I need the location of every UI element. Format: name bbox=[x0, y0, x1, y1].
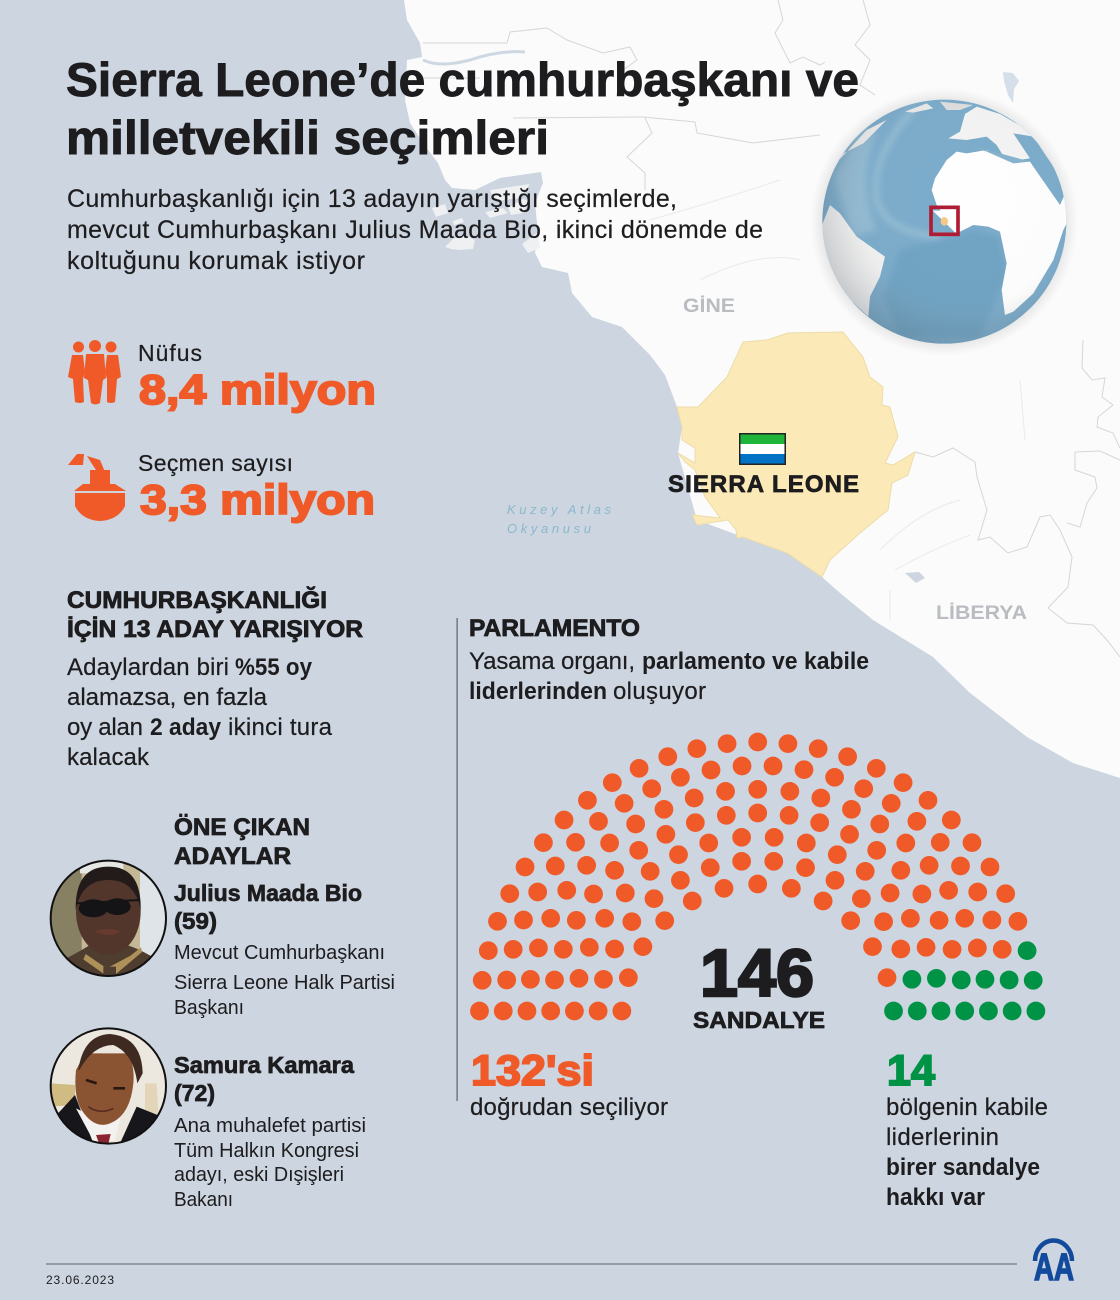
seats: elected orange bbox=[470, 733, 1027, 1020]
map: Sierra Leone territory bbox=[677, 332, 915, 577]
subtitle: koltuğunu korumak istiyor bbox=[67, 247, 365, 275]
seats: tribal chiefs green bbox=[884, 941, 1045, 1020]
icon: red location box bbox=[931, 207, 958, 234]
heading: parliament: PARLAMENTO bbox=[469, 615, 640, 642]
text block: runoff rule: ikinci tura bbox=[228, 714, 333, 741]
callout: 14 tribal chiefs: 14 bbox=[887, 1047, 935, 1095]
callout: 132 directly elected bbox=[470, 1047, 668, 1121]
callout: 14 tribal chiefs bbox=[886, 1047, 1048, 1211]
stat: voters bbox=[68, 450, 375, 523]
subtitle: Cumhurbaşkanlığı için 13 adayın yarıştığı seçimlerde, bbox=[67, 185, 677, 213]
chart: parliament seats bbox=[470, 733, 1045, 1020]
title bbox=[66, 53, 859, 164]
total seats: 146 bbox=[700, 936, 814, 1011]
candidate text: Kamara: Samura Kamara bbox=[174, 1052, 354, 1078]
panel: featured candidates bbox=[50, 814, 395, 1211]
candidate text: Kamara: adayı, eski Dışişleri bbox=[174, 1164, 344, 1186]
icon: people bbox=[68, 340, 121, 404]
candidate text: Kamara bbox=[174, 1052, 366, 1211]
footer date: 23.06.2023 bbox=[46, 1273, 114, 1287]
icon: ballot box bbox=[68, 454, 126, 521]
map label: Gine: GİNE bbox=[683, 296, 735, 317]
title: milletvekili seçimleri bbox=[66, 111, 549, 164]
map label: Kuzey Atlas Okyanusu: Kuzey Atlas bbox=[507, 502, 612, 517]
stat: population: 8,4 milyon bbox=[139, 366, 376, 413]
stat: population bbox=[68, 340, 376, 413]
map: west africa land bbox=[404, 0, 1120, 778]
text block: parliament description: parlamento ve kabile bbox=[642, 648, 869, 675]
text block: parliament description: Yasama organı, bbox=[469, 648, 635, 675]
map label: Kuzey Atlas Okyanusu: Okyanusu bbox=[507, 521, 591, 536]
logo: AA bbox=[1034, 1240, 1074, 1289]
callout: 14 tribal chiefs: bölgenin kabile bbox=[886, 1094, 1048, 1121]
heading: 13 candidates: İÇİN 13 ADAY YARIŞIYOR bbox=[67, 616, 363, 643]
text block: runoff rule: Adaylardan biri bbox=[67, 654, 229, 681]
candidate text: Kamara: (72) bbox=[174, 1080, 215, 1106]
map label: Sierra Leone: SIERRA LEONE bbox=[668, 471, 859, 498]
heading: featured candidates: ADAYLAR bbox=[174, 843, 291, 870]
globe locator bbox=[810, 88, 1078, 356]
heading: 13 candidates: CUMHURBAŞKANLIĞI bbox=[67, 586, 327, 614]
candidate text: Bio: Sierra Leone Halk Partisi bbox=[174, 972, 395, 994]
map label: Liberya: LİBERYA bbox=[936, 603, 1027, 624]
total seats: SANDALYE bbox=[693, 1007, 825, 1033]
stat: voters: Seçmen sayısı bbox=[138, 450, 293, 476]
text block: runoff rule: alamazsa, en fazla bbox=[67, 684, 268, 711]
heading: 13 candidates bbox=[67, 586, 363, 643]
panel: parliament bbox=[469, 615, 1048, 1211]
callout: 14 tribal chiefs: liderlerinin bbox=[886, 1124, 999, 1151]
subtitle: mevcut Cumhurbaşkanı Julius Maada Bio, ikinci dönemde de bbox=[67, 216, 763, 244]
panel: presidential race bbox=[67, 586, 363, 771]
text block: runoff rule bbox=[67, 654, 333, 771]
logo: AA: AA bbox=[1034, 1247, 1074, 1289]
callout: 132 directly elected: 132'si bbox=[471, 1047, 594, 1095]
text block: runoff rule: kalacak bbox=[67, 744, 150, 771]
title: Sierra Leone’de cumhurbaşkanı ve bbox=[66, 53, 859, 106]
candidate text: Bio bbox=[174, 880, 395, 1019]
heading: featured candidates: ÖNE ÇIKAN bbox=[174, 814, 310, 841]
stat: voters: 3,3 milyon bbox=[140, 476, 375, 523]
subtitle bbox=[67, 185, 763, 275]
callout: 14 tribal chiefs: hakkı var bbox=[886, 1184, 985, 1211]
candidate text: Bio: (59) bbox=[174, 908, 217, 934]
total seats bbox=[693, 936, 825, 1033]
text block: runoff rule: oy alan bbox=[67, 714, 143, 741]
photo: Samura Kamara bbox=[50, 1027, 167, 1147]
map label: Kuzey Atlas Okyanusu bbox=[507, 502, 612, 536]
candidate text: Kamara: Ana muhalefet partisi bbox=[174, 1115, 366, 1137]
text block: parliament description: liderlerinden bbox=[469, 678, 607, 705]
stat: population: Nüfus bbox=[138, 340, 202, 366]
callout: 14 tribal chiefs: birer sandalye bbox=[886, 1154, 1040, 1181]
heading: featured candidates bbox=[174, 814, 310, 870]
text block: parliament description: oluşuyor bbox=[613, 678, 706, 705]
text block: parliament description bbox=[469, 648, 869, 705]
icon: Sierra Leone flag bbox=[739, 433, 786, 465]
callout: 132 directly elected: doğrudan seçiliyor bbox=[470, 1094, 668, 1121]
photo: Julius Maada Bio bbox=[50, 860, 167, 980]
candidate text: Kamara: Bakanı bbox=[174, 1189, 233, 1211]
candidate text: Bio: Başkanı bbox=[174, 997, 244, 1019]
candidate text: Bio: Mevcut Cumhurbaşkanı bbox=[174, 942, 385, 964]
candidate text: Bio: Julius Maada Bio bbox=[174, 880, 362, 906]
candidate text: Kamara: Tüm Halkın Kongresi bbox=[174, 1140, 359, 1162]
text block: runoff rule: 2 aday bbox=[150, 714, 222, 741]
map: coastal islands bbox=[432, 184, 540, 253]
text block: runoff rule: %55 oy bbox=[235, 654, 313, 681]
